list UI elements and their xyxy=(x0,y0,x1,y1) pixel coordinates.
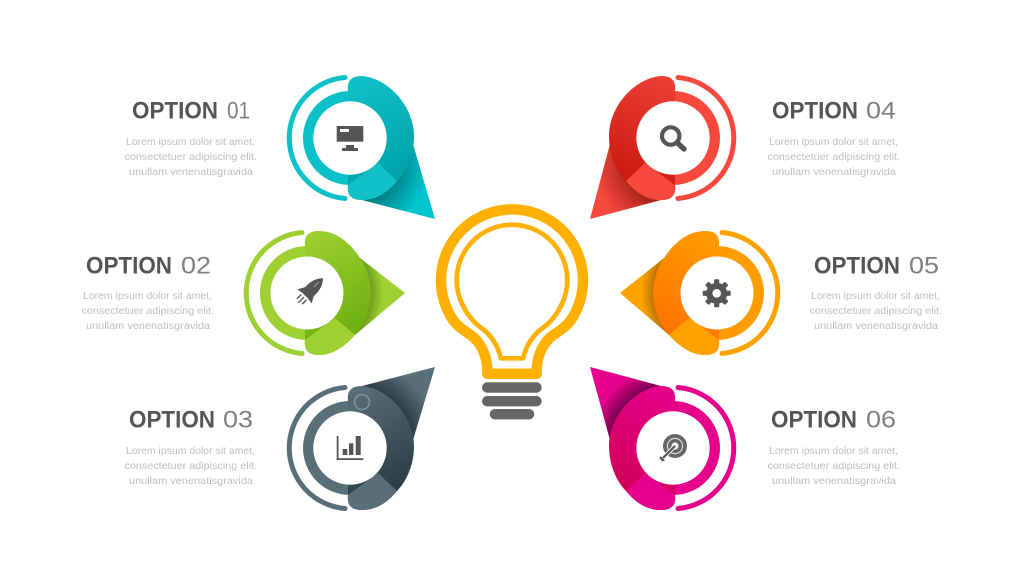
body: option 04: unullam venenatisgravida xyxy=(772,166,896,178)
heading: option 03: 03 xyxy=(223,406,253,434)
bulb outer outline xyxy=(441,209,583,374)
panel: option 02 graphic xyxy=(246,231,405,355)
heading: option 02: 02 xyxy=(181,252,211,280)
heading: option 04: 04 xyxy=(866,98,896,124)
body: option 04: consectetuer adipiscing elit. xyxy=(768,151,900,163)
icon: magnifier xyxy=(662,127,684,149)
body: option 03: consectetuer adipiscing elit. xyxy=(124,460,257,472)
body: option 04: Lorem ipsum dolor sit amet, xyxy=(769,136,898,148)
heading: option 06: 06 xyxy=(866,406,896,434)
body: option 02: Lorem ipsum dolor sit amet, xyxy=(83,290,212,302)
body: option 01: unullam venenatisgravida xyxy=(129,166,253,178)
text block: option 02 xyxy=(82,252,214,332)
panel: option 03 graphic xyxy=(289,367,435,510)
body: option 01: Lorem ipsum dolor sit amet, xyxy=(126,136,255,148)
body: option 02: unullam venenatisgravida xyxy=(86,320,210,332)
icon: rocket xyxy=(291,271,330,310)
body: option 01: consectetuer adipiscing elit. xyxy=(124,151,257,163)
panel: option 06 graphic xyxy=(590,367,734,510)
body: option 05: Lorem ipsum dolor sit amet, xyxy=(811,290,940,302)
text block: option 01 xyxy=(124,98,257,178)
body: option 02 xyxy=(82,290,214,332)
heading: option 04: OPTION xyxy=(772,98,858,124)
bulb base xyxy=(482,382,542,419)
heading: option 06: OPTION xyxy=(771,406,857,434)
heading: option 05: 05 xyxy=(909,252,939,280)
body: option 03: Lorem ipsum dolor sit amet, xyxy=(126,445,255,457)
body: option 03 xyxy=(124,445,257,487)
body: option 05 xyxy=(810,290,942,332)
body: option 06: Lorem ipsum dolor sit amet, xyxy=(769,445,898,457)
body: option 06: unullam venenatisgravida xyxy=(772,475,896,487)
bulb inner outline xyxy=(457,225,567,358)
body: option 06 xyxy=(768,445,900,487)
icon: target xyxy=(660,434,687,462)
text block: option 04 xyxy=(768,98,900,178)
heading: option 01: OPTION xyxy=(132,98,218,124)
icon: monitor xyxy=(337,126,363,151)
panel: option 01 graphic xyxy=(289,76,435,219)
body: option 05: consectetuer adipiscing elit. xyxy=(810,305,942,317)
text block: option 05 xyxy=(810,252,942,332)
body: option 05: unullam venenatisgravida xyxy=(814,320,938,332)
icon: gear xyxy=(703,279,731,307)
heading: option 05: OPTION xyxy=(814,252,900,280)
heading: option 03: OPTION xyxy=(129,406,215,434)
body: option 02: consectetuer adipiscing elit. xyxy=(82,305,214,317)
text block: option 03 xyxy=(124,406,257,487)
heading: option 02: OPTION xyxy=(86,252,172,280)
heading: option 01: 01 xyxy=(227,98,250,124)
body: option 04 xyxy=(768,136,900,178)
panel: option 04 graphic xyxy=(590,76,734,219)
body: option 06: consectetuer adipiscing elit. xyxy=(768,460,900,472)
light bulb xyxy=(441,209,583,419)
text block: option 06 xyxy=(768,406,900,487)
panel: option 05 graphic xyxy=(620,231,778,355)
body: option 03: unullam venenatisgravida xyxy=(129,475,253,487)
body: option 01 xyxy=(124,136,257,178)
icon: bar chart xyxy=(337,436,363,460)
